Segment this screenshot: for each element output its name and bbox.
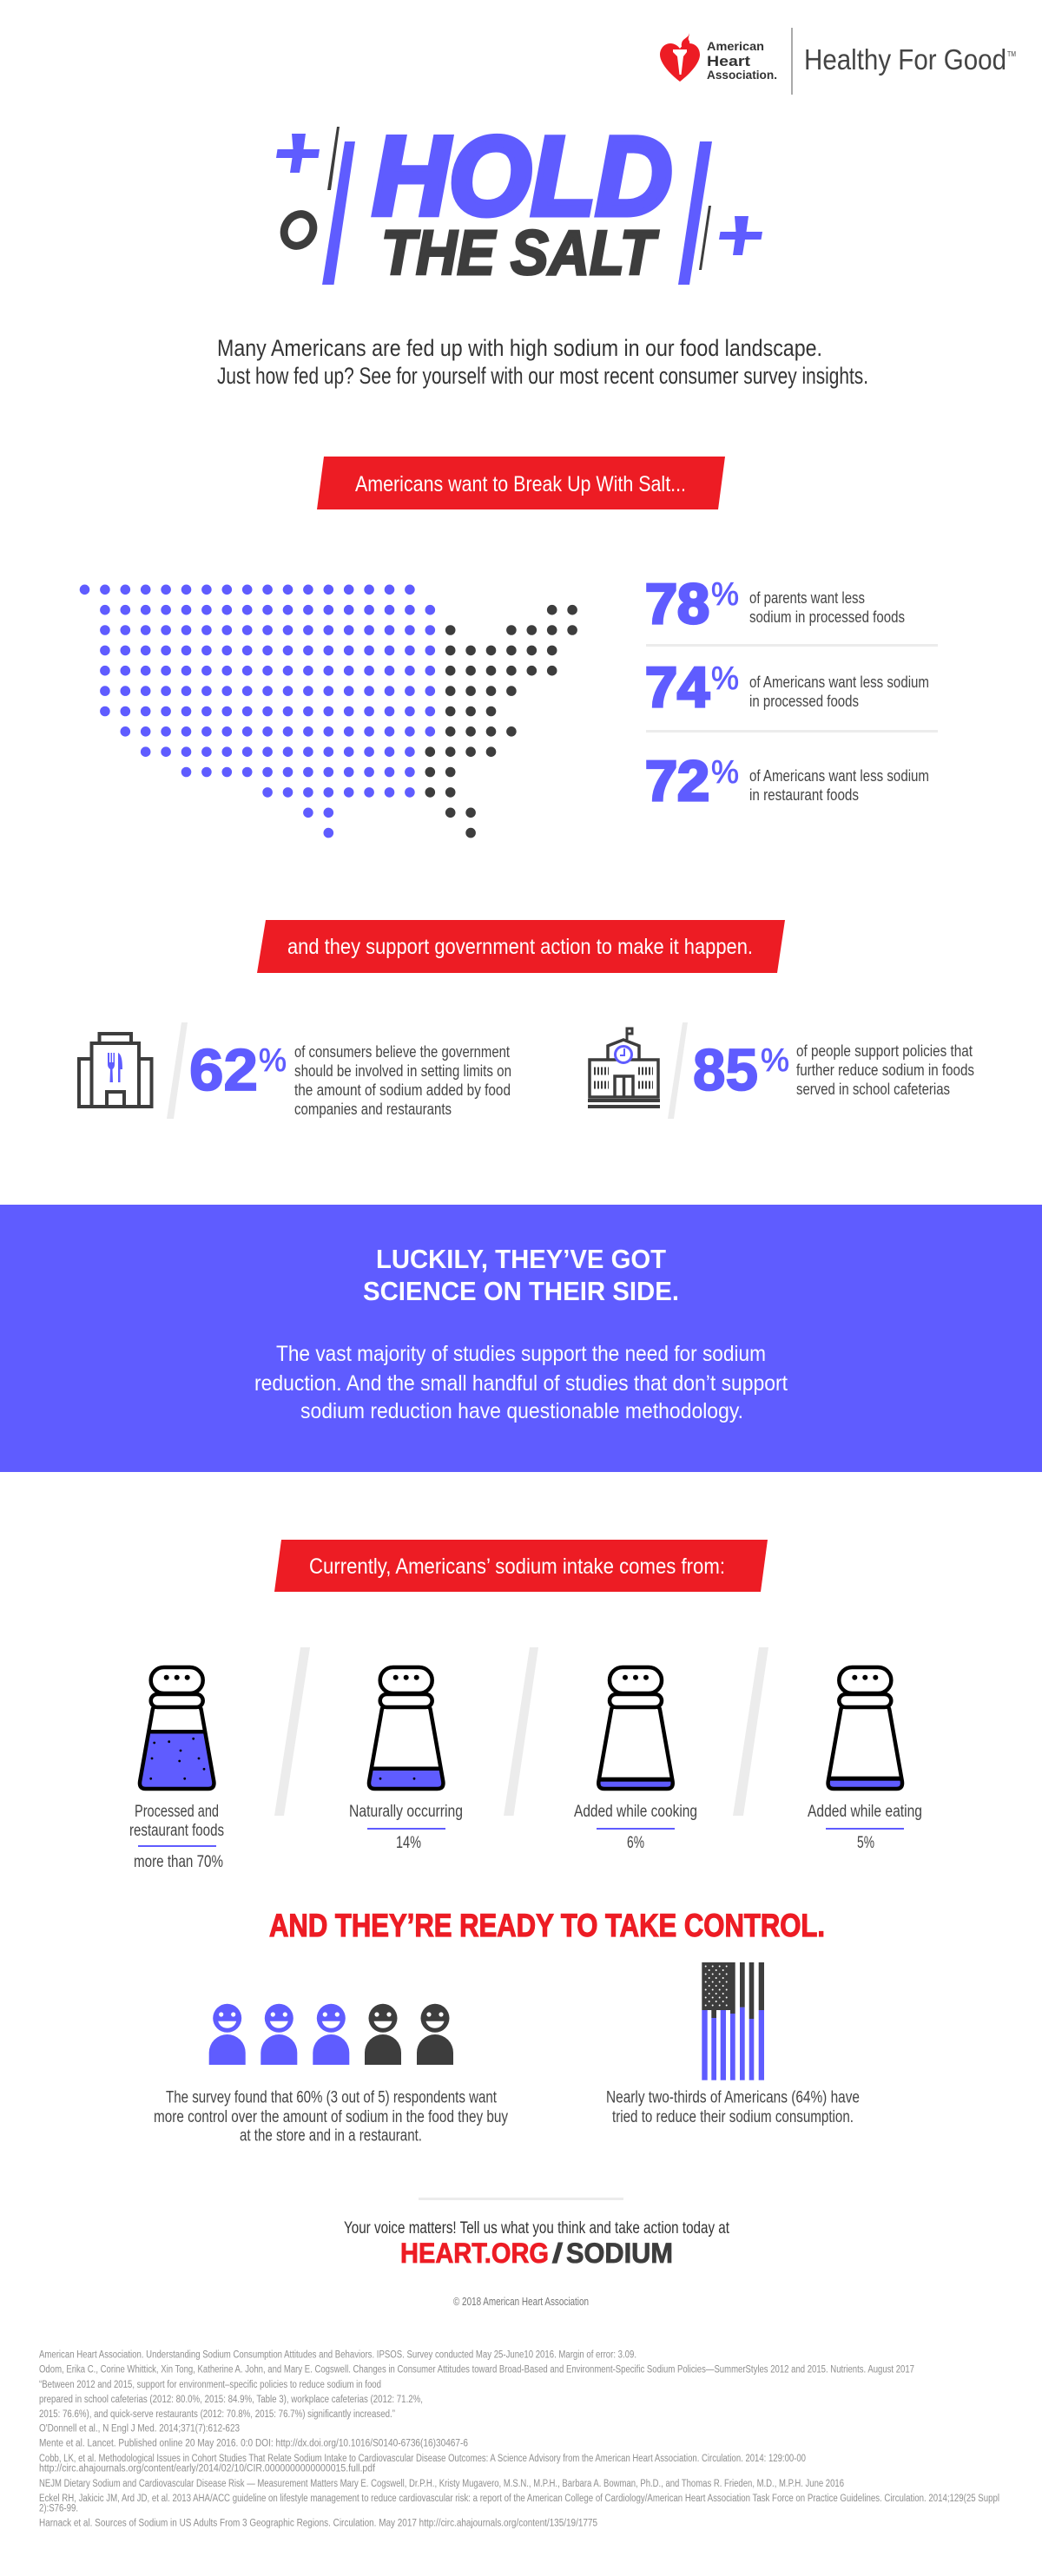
dot map of the United States (85, 589, 572, 833)
stat: 85 percent support: 85 (693, 1037, 758, 1103)
person 4 (365, 2004, 401, 2065)
stat: 85 percent support (668, 1022, 974, 1119)
person 3 (313, 2004, 349, 2065)
stat: 78 percent (645, 572, 905, 635)
intro text (217, 335, 868, 389)
label: Added while eating (808, 1803, 922, 1821)
panel heading (363, 1244, 679, 1306)
icon: salt shaker 6 percent (592, 1667, 679, 1792)
flag stripes blue (702, 2008, 764, 2080)
logo wordmark: Heart (707, 53, 750, 69)
stat: 85 percent support: served in school cafeterias (796, 1081, 950, 1098)
person 5 (417, 2004, 453, 2065)
stat: 62 percent consumers: of consumers believe the government (294, 1043, 510, 1061)
stat: 72 percent: of Americans want less sodium (749, 767, 929, 785)
logo wordmark (707, 40, 777, 82)
icon: ring (279, 209, 319, 251)
icon: salt shaker 14 percent (366, 1665, 445, 1791)
label: Naturally occurring (349, 1803, 463, 1821)
references: Harnack et al. Sources of Sodium in US Adults From 3 Geographic Regions. Circulation. May 2017 http://circ.ahajournals.org/content/135/19/1775 (39, 2519, 597, 2529)
icon row: three of five people (209, 2004, 453, 2065)
call to action (344, 2219, 730, 2269)
label (349, 1803, 463, 1852)
references: Mente et al. Lancet. Published online 20 May 2016. 0:0 DOI: http://dx.doi.org/10.1016/S0140-6736(16)30467-6 (39, 2439, 468, 2449)
panel: science on their side (0, 1205, 1042, 1472)
flag canton and dark stripes (702, 1962, 764, 2019)
logo wordmark: American (707, 40, 764, 53)
url: heart.org/sodium: HEART.ORG (400, 2238, 549, 2269)
heading: ready to take control: AND THEY’RE READY TO TAKE CONTROL. (269, 1908, 825, 1943)
icon: restaurant building (79, 1034, 151, 1107)
banner: government action: and they support government action to make it happen. (287, 935, 753, 959)
logo wordmark: Association. (707, 69, 777, 82)
label (808, 1803, 922, 1852)
person 2 (260, 2004, 297, 2065)
text: survey finding: more control over the amount of sodium in the food they buy (154, 2108, 508, 2126)
references: 2015: 76.6%), and quick-serve restaurants (2012: 70.8%, 2015: 76.7%) significantly increased.” (39, 2409, 395, 2420)
label: 5% (857, 1834, 874, 1852)
stat: 74 percent: % (711, 660, 739, 696)
stat: 62 percent consumers: the amount of sodium added by food (294, 1081, 511, 1099)
stat: 72 percent: % (711, 754, 739, 790)
stat: 78 percent: % (711, 576, 739, 612)
references: O'Donnell et al., N Engl J Med. 2014;371(7):612-623 (39, 2424, 240, 2435)
label: Added while cooking (574, 1803, 697, 1821)
label: restaurant foods (129, 1822, 224, 1840)
icon: plus right (719, 216, 762, 255)
tagline: TM (1007, 50, 1016, 58)
references: Cobb, LK, et al. Methodological Issues in Cohort Studies That Relate Sodium Intake to Cardiovascular Disease Outcomes: A Science Advisory from the American Heart Association. Circulation. 2014: 129:00-00 (39, 2454, 806, 2464)
references: American Heart Association. Understanding Sodium Consumption Attitudes and Behaviors. IPSOS. Survey conducted May 25-June10 2016. Margin of error: 3.09. (39, 2350, 636, 2361)
stat: 74 percent: of Americans want less sodium (749, 674, 929, 691)
stat: 72 percent: in restaurant foods (749, 786, 859, 804)
stat: 62 percent consumers: 62 (189, 1037, 258, 1103)
stat: 62 percent consumers: companies and restaurants (294, 1101, 452, 1118)
stat: 72 percent: 72 (645, 749, 709, 812)
label (129, 1803, 224, 1871)
stat: 62 percent consumers: % (259, 1042, 287, 1078)
icon: school (588, 1028, 660, 1108)
shaker: processed and restaurant foods (129, 1667, 224, 1871)
flag stars (706, 1967, 734, 2005)
stat: 62 percent consumers (167, 1022, 511, 1119)
references: NEJM Dietary Sodium and Cardiovascular Disease Risk — Measurement Matters Mary E. Cogswell, Dr.P.H., Kristy Mugavero, M.S.N., M.P.H., Barbara A. Bowman, Ph.D., and Thomas R. Frieden, M.D., M.P.H. June 2016 (39, 2479, 844, 2489)
icon: salt shaker 5 percent (821, 1667, 908, 1792)
panel body text (254, 1342, 788, 1423)
stat: 74 percent: in processed foods (749, 693, 859, 710)
url: heart.org/sodium: / (551, 2238, 564, 2269)
heading words: THE SALT: THE SALT (381, 219, 659, 288)
map region: blue dots (85, 589, 430, 833)
intro text: Many Americans are fed up with high sodium in our food landscape. (217, 335, 822, 361)
logo: American Heart Association + Healthy For Good (660, 28, 1016, 95)
label: 6% (627, 1834, 644, 1852)
banner: sodium intake (274, 1540, 768, 1592)
url: heart.org/sodium (400, 2238, 673, 2269)
stat: 85 percent support: of people support policies that (796, 1042, 973, 1060)
tagline: Healthy For Good (804, 43, 1006, 76)
label: 14% (396, 1834, 421, 1852)
title decoration: slashes (322, 127, 712, 285)
panel body text: The vast majority of studies support the need for sodium (276, 1342, 766, 1366)
copyright: © 2018 American Heart Association (453, 2295, 589, 2308)
shaker: added while eating (808, 1667, 922, 1852)
heading word: HOLD: HOLD (373, 115, 672, 239)
references: “Between 2012 and 2015, support for environment–specific policies to reduce sodium in food (39, 2380, 381, 2390)
banner: government action (257, 920, 785, 973)
label (574, 1803, 697, 1852)
references: http://circ.ahajournals.org/content/early/2014/02/10/CIR.0000000000000015.full.pdf (39, 2464, 376, 2474)
call to action: Your voice matters! Tell us what you think and take action today at (344, 2219, 730, 2238)
label: Processed and (135, 1803, 219, 1821)
banner: break up with salt: Americans want to Break Up With Salt... (355, 472, 686, 496)
person 1 (209, 2004, 246, 2065)
panel body text: reduction. And the small handful of studies that don’t support (254, 1371, 788, 1396)
stat: 85 percent support: further reduce sodium in foods (796, 1061, 974, 1079)
title: Hold the Salt (276, 115, 762, 288)
shaker: added while cooking (574, 1667, 697, 1852)
stat: 62 percent consumers: should be involved in setting limits on (294, 1062, 511, 1080)
stat: 74 percent: 74 (645, 655, 709, 719)
text: two-thirds: tried to reduce their sodium consumption. (612, 2108, 854, 2126)
text: survey finding (154, 2089, 508, 2146)
label: more than 70% (134, 1853, 223, 1871)
references: 2):S76-99. (39, 2503, 78, 2514)
stat: 78 percent: of parents want less (749, 589, 865, 607)
stat: 72 percent (645, 749, 929, 812)
icon: plus left (276, 134, 320, 173)
stat: 78 percent: 78 (645, 572, 709, 635)
stat: 78 percent: sodium in processed foods (749, 608, 905, 626)
banner: break up with salt (317, 457, 725, 509)
icon: American flag chart (702, 1962, 764, 2080)
text: survey finding: at the store and in a restaurant. (240, 2127, 422, 2146)
panel body text: sodium reduction have questionable methodology. (300, 1399, 743, 1423)
intro text: Just how fed up? See for yourself with our most recent consumer survey insights. (217, 363, 868, 389)
icon: salt shaker more than 70 percent (134, 1667, 221, 1792)
panel heading: SCIENCE ON THEIR SIDE. (363, 1276, 679, 1306)
stat: 85 percent support: % (761, 1042, 789, 1078)
map region: dark dots (430, 610, 572, 833)
references: prepared in school cafeterias (2012: 80.0%, 2015: 84.9%, Table 3), workplace cafeterias (2012: 71.2%, (39, 2395, 423, 2405)
banner: sodium intake: Currently, Americans’ sodium intake comes from: (309, 1554, 725, 1579)
panel heading: LUCKILY, THEY’VE GOT (376, 1244, 666, 1274)
text: two-thirds: Nearly two-thirds of Americans (64%) have (606, 2089, 860, 2107)
url: heart.org/sodium: SODIUM (566, 2238, 673, 2269)
references (39, 2350, 999, 2529)
stat: 74 percent (645, 655, 929, 719)
text: two-thirds (606, 2089, 860, 2126)
shaker: naturally occurring (349, 1667, 463, 1852)
text: survey finding: The survey found that 60% (3 out of 5) respondents want (166, 2089, 498, 2107)
icon: heart and torch (660, 33, 700, 82)
